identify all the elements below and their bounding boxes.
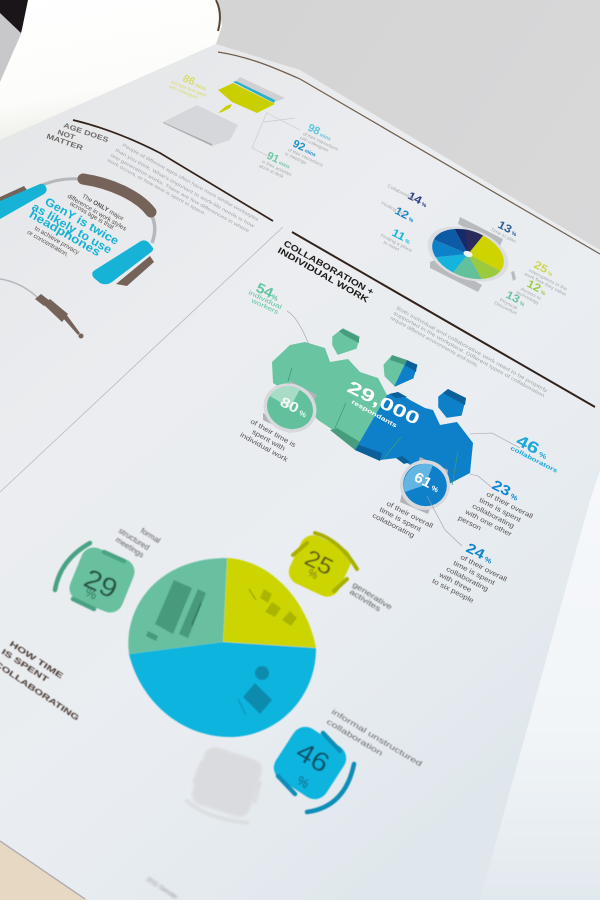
stat: 54 individual workers: workers [249, 297, 279, 316]
paragraph: supported in the workplace. Different types of collaboration [392, 311, 546, 399]
paragraph: work occurs, or how time is spent in space. [107, 158, 207, 216]
divider line [0, 227, 283, 492]
callout text: headphones [27, 209, 102, 259]
icon: sticky notes [249, 589, 297, 626]
icon: pie watch [420, 216, 516, 292]
heading: how time is spent collaborating: HOW TIME [8, 639, 65, 680]
chair: formal structured meetings [55, 543, 138, 616]
stat: 12 blue [378, 197, 417, 225]
stat: 12 blue: 12 % [393, 204, 417, 225]
heading: INDIVIDUAL WORK [276, 245, 372, 305]
stat: 86: average time spent [170, 79, 208, 98]
caption: 61 percent [371, 496, 435, 545]
stat: 23 percent: person [457, 514, 483, 532]
stat: 92: of their interactions [287, 147, 324, 168]
label: informal unstructured collaboration [325, 707, 424, 768]
stat: 13 navy: 13 % [496, 218, 520, 239]
stat: 24 percent: collaborating [445, 565, 490, 593]
stat: 86: with colleagues [168, 84, 199, 100]
callout lines [287, 311, 520, 546]
stat: 98: 98 mins [306, 122, 334, 144]
icon: headphone jack [0, 279, 84, 338]
stat: 13 navy: Time to plan [489, 227, 517, 245]
chart: respondents figures [272, 329, 473, 485]
stat: 86: 86 mins [181, 73, 209, 93]
icon: right watch 61 percent [396, 457, 454, 514]
heading [45, 122, 109, 152]
stat: 91: in their activities [261, 159, 293, 177]
stat: 24 percent: time is spent [452, 559, 497, 587]
stat: 23 percent: 23 % [489, 478, 522, 504]
chair: informal unstructured collaboration [269, 722, 354, 812]
lower right backing surface [478, 470, 600, 900]
stat: 24 percent: of their overall [459, 553, 509, 583]
chair: informal unstructured collaboration: % [294, 773, 312, 792]
stat: 98: with colleagues [299, 135, 330, 153]
stat: 13 green: Discomfort [493, 300, 518, 317]
icon: meeting table [146, 580, 206, 641]
stat: 91: alone at desk [258, 163, 285, 179]
label: generative activities: generative [351, 580, 394, 612]
heading [276, 238, 376, 305]
chair: empty grey [187, 744, 265, 823]
stat: 54 individual workers: individual [247, 289, 283, 311]
stat: 24 percent: to six people [431, 577, 475, 605]
green figure bodies [272, 342, 387, 449]
stat: 86 [168, 69, 212, 103]
paragraph: People of different ages often have more similar workstyles [122, 143, 260, 222]
label: informal unstructured collaboration: informal unstructured [330, 707, 424, 768]
heading: MATTER [45, 133, 84, 152]
stat: 98 [299, 121, 344, 156]
panel: collaboration and individual work [239, 232, 595, 614]
stat: 14: Collaborating [386, 183, 416, 202]
callout text: to achieve privacy [33, 225, 81, 257]
heading: how time is spent collaborating: IS SPENT [0, 647, 50, 684]
stat: 11: to meet [382, 240, 401, 253]
stat: 46 collaborators [509, 432, 566, 475]
stat: 12 lime: 12 % [525, 277, 549, 298]
paragraph: Both individual and collaborative work need to be properly [395, 306, 549, 394]
label: generative activities: activites [348, 587, 383, 613]
stat: 11: 11 % [390, 226, 414, 247]
callout text [26, 193, 128, 259]
stat: 91 [258, 149, 298, 182]
stat: 14 [385, 178, 430, 210]
icon: headphones [0, 179, 155, 286]
stat: 23 percent: collaborating [471, 502, 516, 530]
split head [384, 355, 417, 386]
paragraph [107, 143, 260, 234]
stat lines [252, 112, 300, 156]
caption: 80 percent [239, 417, 297, 464]
stat: 13 navy [489, 216, 523, 245]
stat: 13 green: 13 % [504, 288, 528, 309]
caption: 80 percent: individual work [239, 430, 290, 464]
total respondents: 29,000 [344, 377, 423, 429]
heading: AGE DOES [62, 122, 109, 144]
callout text: The ONLY major [81, 193, 125, 222]
stat: 23 percent: with one other [463, 507, 514, 538]
stat: 25: Interruptions in the [527, 268, 568, 292]
label: formal structured meetings [114, 526, 162, 560]
icon: person at table [238, 666, 272, 715]
stat: 23 percent [457, 470, 541, 551]
arm lines [288, 368, 458, 485]
rule [292, 232, 595, 407]
chair: formal structured meetings: % [83, 584, 100, 603]
stat: 12 lime: technology [515, 290, 540, 306]
callout text: GenY is twice [43, 196, 120, 248]
stat: 98: of their interactions [302, 131, 339, 152]
top brown rule [218, 52, 600, 254]
stat: 92: in meetings [284, 151, 308, 166]
chart: pie [128, 558, 316, 737]
panel: watch breakdown [377, 178, 575, 318]
blue figure bodies [355, 392, 473, 485]
stat: 14: 14 % [406, 189, 430, 210]
stat: 13 green: Physical [498, 297, 518, 311]
caption: 61 percent: collaborating [371, 511, 416, 539]
label: formal structured meetings: formal [139, 526, 162, 545]
label: formal structured meetings: meetings [114, 535, 146, 560]
panel: how time is spent collaborating [55, 526, 424, 823]
stat: 23 percent: time is spent [478, 496, 523, 524]
stat: 25: work flow they value [523, 271, 567, 298]
stat: 54 individual workers: 54% [254, 279, 283, 304]
heading: COLLABORATION + [282, 238, 376, 297]
icon: right watch 61 percent: 61 % [412, 469, 444, 496]
caption: 61 percent: time is spent [378, 505, 423, 534]
curled page corner [0, 0, 222, 140]
chair: generative activities [285, 531, 357, 601]
label: informal unstructured collaboration: collaboration [325, 717, 384, 758]
stat: 46 collaborators: collaborators [509, 446, 559, 475]
stat: 13 green [493, 285, 528, 318]
callout text: across age is that [69, 200, 115, 231]
chair: formal structured meetings: 29 [79, 563, 122, 605]
chair: generative activities: 25 [300, 545, 337, 581]
page bottom edge [0, 841, 85, 899]
callout text: as likely to use [30, 201, 113, 257]
blue head [439, 389, 466, 417]
total respondents: respondants [350, 400, 398, 430]
stat: 12 lime: Access to [519, 286, 542, 302]
chair: informal unstructured collaboration: 46 [291, 736, 334, 779]
caption: 80 percent: spent with [251, 428, 287, 452]
stat: 24 percent [431, 533, 515, 614]
caption: 80 percent: of their time is [249, 417, 297, 449]
label: generative activities [348, 580, 394, 613]
stat: 92 [284, 137, 329, 172]
total respondents [344, 377, 423, 430]
stat: 92: 92 mins [291, 138, 319, 160]
callout text: difference in work styles [66, 193, 128, 233]
caption: 61 percent: of their overall [385, 499, 435, 530]
tan table edge [0, 840, 88, 900]
stat: 24 percent: with three [437, 570, 473, 594]
stat: 11 [377, 222, 419, 258]
icon: left watch 80 percent: 80 % [278, 393, 312, 421]
heading: NOT [56, 129, 76, 142]
stat: 91: 91 mins [265, 150, 293, 172]
stat: 46 collaborators: 46 % [513, 432, 552, 463]
stat: 12 blue: Finding time [380, 201, 408, 218]
stat: 25: 25 % [532, 258, 556, 279]
heading: how time is spent collaborating [0, 639, 81, 723]
icon: left watch 80 percent [255, 375, 325, 441]
callout text: or concentration. [26, 229, 70, 259]
stat: 12 lime [515, 274, 549, 307]
paragraph: require different environments and tools. [389, 316, 479, 369]
stat: 23 percent: of their overall [485, 490, 535, 520]
rule [73, 120, 273, 221]
panel: hourglass stats [163, 69, 344, 182]
stat: 54 individual workers [247, 279, 283, 316]
stat: 25 [523, 256, 575, 298]
stat: 24 percent: 24 % [463, 541, 496, 567]
green head [333, 329, 359, 354]
stat: 11: Finding a place [379, 233, 413, 254]
paragraph [389, 306, 549, 399]
label: formal structured meetings: structured [117, 526, 151, 552]
panel: age does not matter [0, 120, 273, 338]
icon: hourglass [163, 77, 285, 146]
paragraph: one generation works. There are few differences in where [110, 153, 251, 234]
paragraph: than you think. What's important to work-life needs is how [115, 148, 256, 229]
chair: generative activities: % [306, 567, 320, 582]
